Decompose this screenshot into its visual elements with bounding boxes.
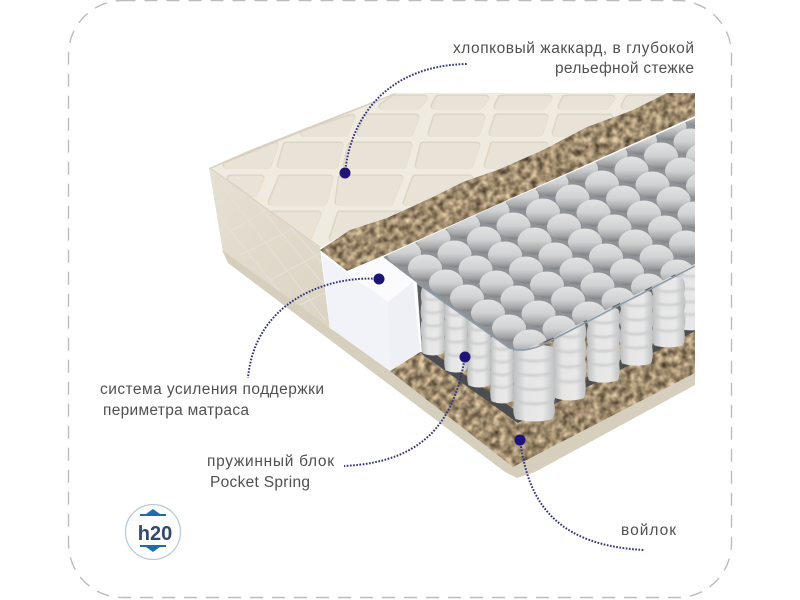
leader: spring block — [344, 352, 470, 466]
mattress base strip — [222, 250, 695, 478]
spring block dark interior — [417, 274, 676, 352]
label: perimeter support — [100, 381, 324, 419]
label: spring block: пружинный блок — [207, 453, 334, 470]
quilt cells — [226, 99, 676, 239]
mattress quilted top — [209, 93, 666, 248]
quilt edge seam — [209, 93, 395, 248]
spring wire base — [422, 322, 695, 423]
label: perimeter support: система усиления поддержки — [100, 381, 324, 398]
spring block frame wire — [417, 266, 695, 350]
label: felt: войлок — [621, 522, 676, 539]
leader: perimeter support — [248, 274, 384, 378]
side quilting — [243, 219, 325, 320]
label: perimeter support: периметра матраса — [103, 402, 249, 419]
mattress cutaway illustration — [200, 90, 720, 478]
label: spring block — [207, 453, 334, 491]
icon: height 20 badge — [126, 504, 180, 560]
white foam perimeter block — [322, 255, 420, 371]
leader: jacquard cover — [340, 64, 468, 178]
label: spring block: Pocket Spring — [210, 474, 310, 491]
leader: felt — [514, 434, 644, 550]
pocket springs top surface — [383, 118, 695, 350]
pocket springs front columns — [421, 262, 708, 421]
label: jacquard cover: хлопковый жаккард, в глубокой — [453, 40, 694, 57]
mattress side panel — [209, 168, 330, 330]
icon: height 20 badge: h20 — [138, 523, 172, 545]
bottom felt layer — [385, 325, 697, 470]
label: jacquard cover: рельефной стежке — [555, 60, 694, 77]
quilt cell shadows — [226, 98, 676, 238]
top felt layer — [310, 90, 700, 275]
label: jacquard cover — [453, 40, 694, 77]
